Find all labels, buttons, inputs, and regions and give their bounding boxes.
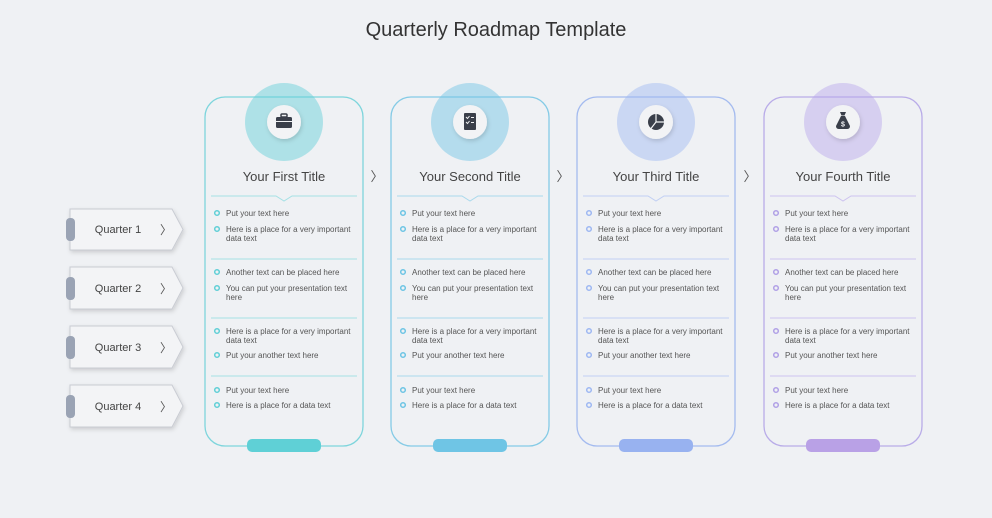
icon: checklist: [464, 113, 476, 130]
icon: money bag: $: [841, 122, 845, 128]
panel: fourth: Here is a place for a data text: [785, 401, 890, 410]
quarter 1: 〉: [160, 223, 172, 237]
panel: second: here: [412, 293, 429, 302]
panel: first: Put your text here: [226, 386, 290, 395]
icon: pie chart: [648, 114, 664, 130]
panel: first: Here is a place for a very important: [226, 327, 351, 336]
panel: first: data text: [226, 234, 257, 243]
icon: briefcase: [276, 114, 292, 128]
arrow 1: 〉: [370, 169, 384, 184]
panel: fourth: [764, 83, 922, 452]
panel: third: [577, 83, 735, 452]
panel: third: Here is a place for a very important: [598, 327, 723, 336]
quarter 1: [66, 209, 183, 250]
panel: second: data text: [412, 336, 443, 345]
panel: third: You can put your presentation text: [598, 284, 720, 293]
panel: first: Put your another text here: [226, 351, 319, 360]
panel: fourth: data text: [785, 336, 816, 345]
arrow 2: 〉: [556, 169, 570, 184]
panel: fourth: Here is a place for a very important: [785, 327, 910, 336]
panel: second: Put your text here: [412, 386, 476, 395]
arrow 3: 〉: [743, 169, 757, 184]
panel: third: Another text can be placed here: [598, 268, 712, 277]
panel: fourth: Here is a place for a very important: [785, 225, 910, 234]
panel: first: You can put your presentation text: [226, 284, 348, 293]
panel: third: data text: [598, 234, 629, 243]
panel: third: Put your another text here: [598, 351, 691, 360]
panel: fourth: Put your another text here: [785, 351, 878, 360]
panel: second: Here is a place for a very important: [412, 225, 537, 234]
panel: first: Your First Title: [243, 169, 325, 184]
quarter 4: Quarter 4: [95, 401, 141, 413]
panel: fourth: Another text can be placed here: [785, 268, 899, 277]
panel: first: Here is a place for a data text: [226, 401, 331, 410]
panel: first: Another text can be placed here: [226, 268, 340, 277]
panel: third: Here is a place for a data text: [598, 401, 703, 410]
panel: first: Put your text here: [226, 209, 290, 218]
title: Quarterly Roadmap Template: [366, 19, 626, 41]
panel: second: Another text can be placed here: [412, 268, 526, 277]
icon: money bag: [836, 112, 850, 129]
quarter 2: 〉: [160, 282, 172, 296]
panel: third: Put your text here: [598, 386, 662, 395]
panel: third: data text: [598, 336, 629, 345]
panel: fourth: here: [785, 293, 802, 302]
panel: fourth: data text: [785, 234, 816, 243]
quarter 1: Quarter 1: [95, 224, 141, 236]
panel: second: Put your another text here: [412, 351, 505, 360]
panel: third: here: [598, 293, 615, 302]
panel: first: [205, 83, 363, 452]
panel: first: Here is a place for a very important: [226, 225, 351, 234]
quarter 3: 〉: [160, 341, 172, 355]
quarter 3: Quarter 3: [95, 342, 141, 354]
panel: fourth: You can put your presentation text: [785, 284, 907, 293]
panel: second: [391, 83, 549, 452]
panel: second: You can put your presentation text: [412, 284, 534, 293]
panel: second: Put your text here: [412, 209, 476, 218]
panel: first: here: [226, 293, 243, 302]
quarter 2: Quarter 2: [95, 283, 141, 295]
panel: second: data text: [412, 234, 443, 243]
panel: second: Here is a place for a data text: [412, 401, 517, 410]
panel: fourth: Put your text here: [785, 386, 849, 395]
quarter 4: 〉: [160, 400, 172, 414]
panel: first: data text: [226, 336, 257, 345]
quarter 3: [66, 326, 183, 368]
quarter 4: [66, 385, 183, 427]
panel: third: Here is a place for a very important: [598, 225, 723, 234]
quarter 2: [66, 267, 183, 309]
panel: fourth: Put your text here: [785, 209, 849, 218]
panel: fourth: Your Fourth Title: [796, 169, 890, 184]
panel: third: Your Third Title: [613, 169, 699, 184]
panel: second: Your Second Title: [419, 169, 521, 184]
panel: second: Here is a place for a very important: [412, 327, 537, 336]
panel: third: Put your text here: [598, 209, 662, 218]
